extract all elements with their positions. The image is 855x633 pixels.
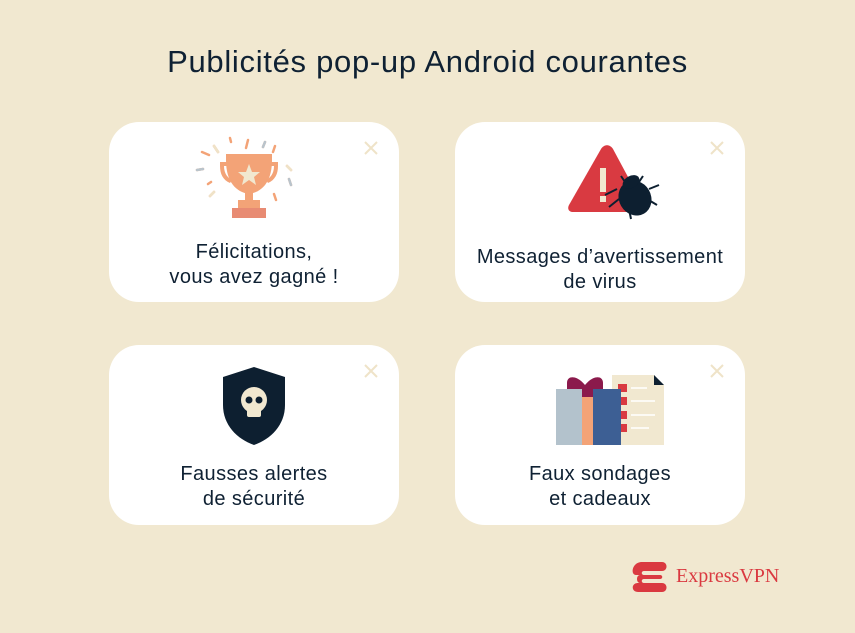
icon: close: [364, 141, 378, 155]
panel: virus warnings: Messages d’avertissement: [477, 246, 723, 268]
icon: warning with bug: [568, 145, 660, 220]
panel: fake surveys and gifts: et cadeaux: [549, 488, 651, 510]
icon: skull shield: [223, 367, 285, 445]
panel: fake surveys and gifts: Faux sondages: [529, 463, 671, 485]
panel: virus warnings: de virus: [563, 271, 637, 293]
logo: ExpressVPN: ExpressVPN: [676, 565, 779, 587]
panel: fake security alerts: de sécurité: [203, 488, 305, 510]
text: vous avez gagné !: [169, 266, 339, 288]
text: [169, 241, 339, 288]
panel: fake surveys and gifts: [455, 345, 745, 525]
text: Félicitations,: [196, 241, 312, 263]
icon: trophy: [196, 136, 292, 218]
panel: virus warnings: [455, 122, 745, 302]
title: Publicités pop-up Android courantes: [167, 44, 688, 79]
panel: congratulations: [109, 122, 399, 302]
logo: ExpressVPN: [632, 562, 779, 592]
panel: fake security alerts: [109, 345, 399, 525]
icon: gift and checklist: [556, 375, 664, 445]
panel: fake security alerts: Fausses alertes: [180, 463, 328, 485]
